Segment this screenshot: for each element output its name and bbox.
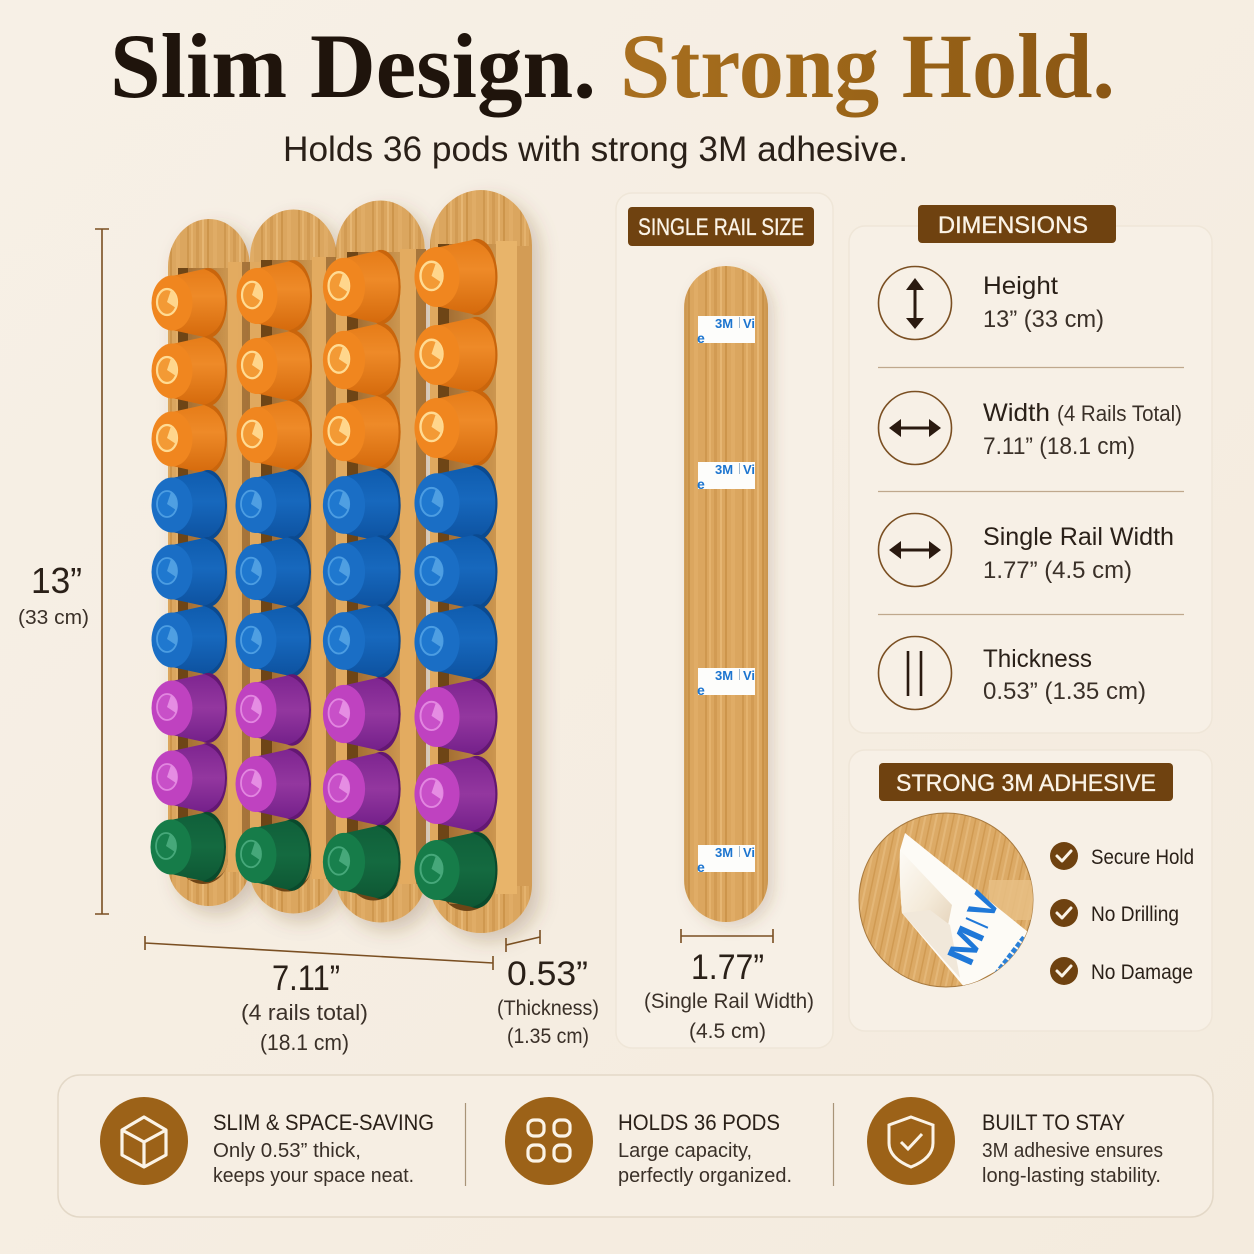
adhesive tape 1 bbox=[697, 316, 755, 346]
width dimension label: 7.11” bbox=[272, 959, 340, 998]
benefit text: slim and space-saving: Only 0.53” thick, bbox=[213, 1140, 361, 1162]
panel: single rail size bbox=[616, 193, 833, 1048]
adhesive tape 2: 3M bbox=[715, 462, 733, 477]
pods column 1 bbox=[150, 268, 227, 882]
adhesive tape 2: e bbox=[697, 476, 705, 492]
heading: dimensions bbox=[918, 205, 1116, 243]
adhesive tape 4: 3M bbox=[715, 845, 733, 860]
icon: height arrow bbox=[878, 266, 952, 340]
subtitle: Holds 36 pods with strong 3M adhesive. bbox=[283, 130, 908, 169]
panel: dimensions bbox=[849, 205, 1212, 733]
adhesive tape 1: 3M bbox=[715, 316, 733, 331]
pods column 2 bbox=[236, 260, 312, 891]
icon: shield with check bbox=[867, 1097, 955, 1185]
rail 2 bbox=[250, 209, 337, 913]
height dimension label: 13” bbox=[31, 560, 82, 601]
thickness dimension line bbox=[506, 930, 540, 952]
row: thickness: Thickness bbox=[983, 645, 1092, 673]
adhesive photo: peeling tape on wood: M bbox=[940, 920, 994, 972]
adhesive tape 1: e bbox=[697, 330, 705, 346]
title: Slim Design. bbox=[110, 15, 596, 117]
heading: single rail size bbox=[628, 207, 814, 246]
icon: cube bbox=[100, 1097, 188, 1185]
row: width bbox=[983, 399, 1182, 460]
adhesive tape 3: Vi bbox=[743, 668, 755, 683]
row: thickness: 0.53” (1.35 cm) bbox=[983, 678, 1146, 705]
single rail back view bbox=[684, 266, 768, 922]
rail width label: (Single Rail Width) bbox=[644, 990, 814, 1013]
width dimension line bbox=[145, 936, 493, 970]
icon: four pods grid bbox=[505, 1097, 593, 1185]
benefit text: holds 36 pods: HOLDS 36 PODS bbox=[618, 1110, 780, 1135]
benefit: secure hold bbox=[1050, 842, 1194, 870]
adhesive tape 1: Vi bbox=[743, 316, 755, 331]
rail 1 bbox=[168, 219, 250, 906]
width dimension label: (18.1 cm) bbox=[260, 1030, 349, 1055]
adhesive tape 3: 3M bbox=[715, 668, 733, 683]
row: height bbox=[983, 272, 1104, 333]
thickness dimension label: 0.53” bbox=[507, 955, 588, 993]
benefit text: slim and space-saving bbox=[213, 1110, 434, 1187]
height dimension line bbox=[95, 229, 109, 914]
thickness dimension label: (1.35 cm) bbox=[507, 1025, 589, 1048]
adhesive photo: peeling tape on wood bbox=[859, 813, 1039, 988]
rail width bracket bbox=[681, 929, 773, 943]
height dimension label bbox=[18, 560, 89, 629]
width dimension label bbox=[241, 959, 368, 1055]
heading: single rail size: SINGLE RAIL SIZE bbox=[638, 214, 804, 241]
adhesive tape 4: e bbox=[697, 859, 705, 875]
adhesive tape 3 bbox=[697, 668, 755, 698]
adhesive tape 3: e bbox=[697, 682, 705, 698]
row: thickness bbox=[983, 645, 1146, 705]
adhesive tape 2: Vi bbox=[743, 462, 755, 477]
adhesive photo: peeling tape on wood: V bbox=[960, 885, 1009, 926]
row: width: Width bbox=[983, 399, 1050, 427]
row: height: 13” (33 cm) bbox=[983, 306, 1104, 333]
panel: bottom benefits bbox=[58, 1075, 1213, 1217]
row: width: (4 Rails Total) bbox=[1057, 401, 1182, 426]
adhesive tape 2 bbox=[697, 462, 755, 492]
pods column 3 bbox=[323, 250, 401, 899]
width dimension label: (4 rails total) bbox=[241, 1000, 368, 1025]
thickness dimension label: (Thickness) bbox=[497, 997, 599, 1020]
height dimension label: (33 cm) bbox=[18, 607, 89, 629]
adhesive tape 4: Vi bbox=[743, 845, 755, 860]
heading: strong 3M adhesive bbox=[879, 763, 1173, 801]
thickness dimension label bbox=[497, 955, 599, 1048]
benefit text: built to stay: 3M adhesive ensures bbox=[982, 1140, 1163, 1162]
benefit: no damage: No Damage bbox=[1091, 961, 1193, 984]
benefit text: holds 36 pods: perfectly organized. bbox=[618, 1165, 792, 1187]
heading: dimensions: DIMENSIONS bbox=[938, 212, 1088, 239]
rail 3 bbox=[336, 200, 426, 922]
rail width label: 1.77” bbox=[691, 948, 764, 987]
row: height: Height bbox=[983, 272, 1058, 300]
benefit: secure hold: Secure Hold bbox=[1091, 846, 1194, 869]
benefit: no damage bbox=[1050, 957, 1193, 985]
adhesive tape 4 bbox=[697, 845, 755, 875]
benefit text: built to stay bbox=[982, 1110, 1163, 1187]
title: Strong Hold. bbox=[620, 15, 1115, 117]
title bbox=[110, 15, 1115, 117]
benefit text: holds 36 pods: Large capacity, bbox=[618, 1140, 752, 1162]
panel: strong 3M adhesive bbox=[849, 750, 1212, 1031]
pods column 4 bbox=[414, 239, 498, 908]
benefit text: holds 36 pods bbox=[618, 1110, 792, 1187]
benefit: no drilling: No Drilling bbox=[1091, 903, 1179, 926]
icon: thickness bbox=[878, 636, 952, 710]
rail 4 bbox=[430, 190, 532, 933]
icon: single rail width arrow bbox=[878, 514, 952, 586]
benefit text: built to stay: long-lasting stability. bbox=[982, 1165, 1161, 1187]
product: four bamboo rails with pods bbox=[150, 190, 532, 933]
row: single rail width: Single Rail Width bbox=[983, 523, 1174, 551]
benefit text: slim and space-saving: keeps your space neat. bbox=[213, 1165, 414, 1187]
heading: strong 3M adhesive: STRONG 3M ADHESIVE bbox=[896, 770, 1156, 797]
row: width: 7.11” (18.1 cm) bbox=[983, 433, 1135, 460]
rail width label bbox=[644, 948, 814, 1043]
row: single rail width: 1.77” (4.5 cm) bbox=[983, 557, 1132, 584]
benefit: no drilling bbox=[1050, 899, 1179, 927]
benefit text: slim and space-saving: SLIM & SPACE-SAVING bbox=[213, 1110, 434, 1135]
row: single rail width bbox=[983, 523, 1174, 584]
icon: width arrow bbox=[878, 392, 952, 464]
benefit text: built to stay: BUILT TO STAY bbox=[982, 1110, 1125, 1135]
rail width label: (4.5 cm) bbox=[689, 1020, 766, 1043]
